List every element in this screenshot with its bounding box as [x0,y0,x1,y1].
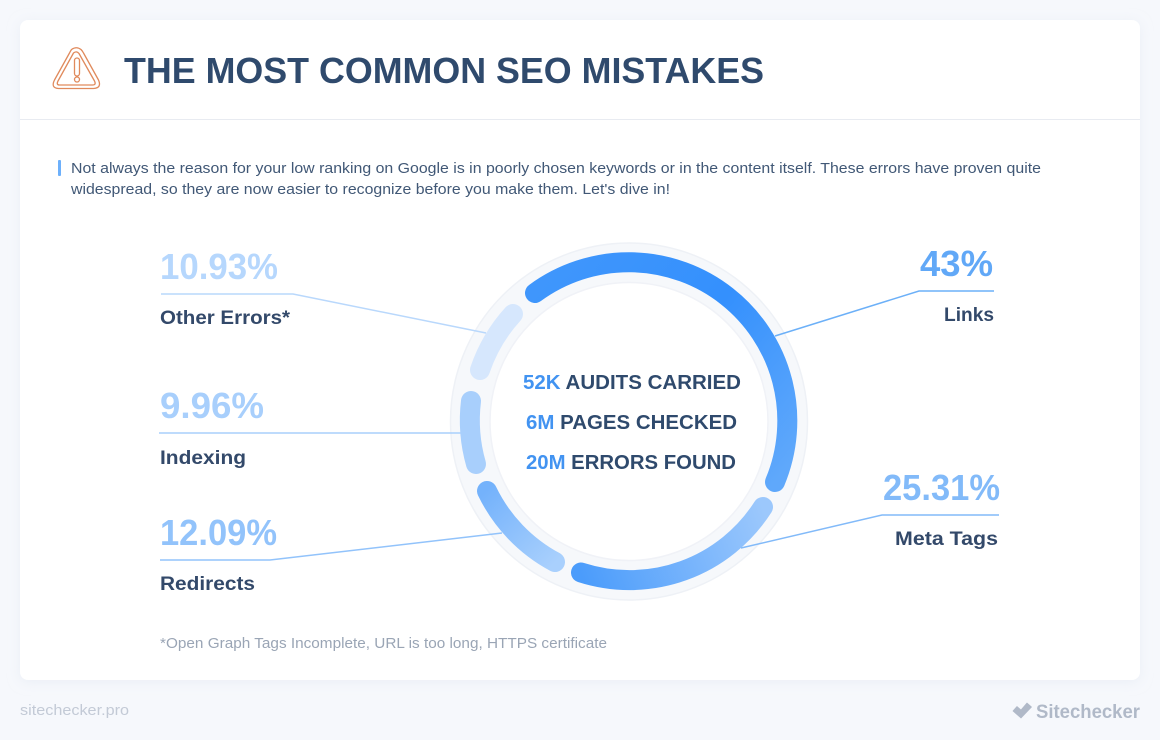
segment: other errors [480,314,513,370]
segment: redirects [487,491,555,562]
callout: redirects: 12.09% [160,512,277,553]
callout: redirects [160,512,502,595]
icon: check mark [1013,703,1032,718]
stat: audits: 52K AUDITS CARRIED [523,372,741,394]
donut chart [450,243,808,600]
callout: other errors: 10.93% [160,246,278,287]
header divider [20,119,1140,120]
center stats [523,372,741,474]
footer logo: Sitechecker [1036,702,1141,723]
footnote: *Open Graph Tags Incomplete, URL is too long, HTTPS certificate [160,636,607,652]
intro text block: Not always the reason for your low ranking on Google is in poorly chosen keywords or in the content itself. These errors have proven quite [71,161,1041,177]
stat: errors: 20M ERRORS FOUND [526,452,736,474]
callout: meta tags: 25.31% [883,467,1000,508]
callout: links: 43% [920,243,993,284]
callout: indexing: 9.96% [160,385,264,426]
callout: links: Links [944,305,994,326]
segment: links [535,262,787,482]
segment: meta tags [581,507,763,580]
segment: indexing [470,401,476,464]
title: THE MOST COMMON SEO MISTAKES [124,50,764,91]
callout: indexing [159,385,462,469]
intro text block [58,160,1041,198]
callout: links [775,243,994,336]
callout: meta tags [741,467,1000,550]
callout: meta tags: Meta Tags [895,529,998,550]
callout: other errors [160,246,486,333]
ring background [470,262,788,580]
footer url: sitechecker.pro [20,703,129,719]
intro text block: widespread, so they are now easier to recognize before you make them. Let's dive in! [70,182,670,198]
callout: indexing: Indexing [160,448,246,469]
callout: redirects: Redirects [160,574,255,595]
callout: other errors: Other Errors* [160,308,291,329]
icon: warning triangle [53,48,100,88]
stat: pages: 6M PAGES CHECKED [526,412,737,434]
